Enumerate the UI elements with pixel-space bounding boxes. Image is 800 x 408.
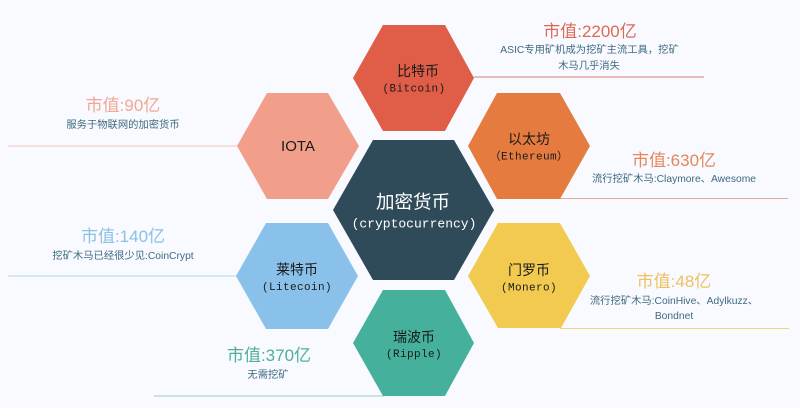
callout: Ethereum value: 市值:630亿 xyxy=(632,151,716,170)
hexagon: IOTA xyxy=(237,93,359,199)
callout: Litecoin value xyxy=(52,227,194,262)
leader line: Monero xyxy=(560,328,789,330)
hexagon: Ethereum xyxy=(468,93,590,199)
hexagon: Ripple: (Ripple) xyxy=(386,349,442,361)
hexagon: Monero: 门罗币 xyxy=(508,262,550,278)
callout: Ethereum value: 流行挖矿木马:Claymore、Awesome xyxy=(592,172,756,185)
callout: IOTA value: 服务于物联网的加密货币 xyxy=(66,118,180,131)
hexagon: Litecoin: 莱特币 xyxy=(276,262,318,278)
hexagon: Bitcoin: 比特币 xyxy=(397,63,439,79)
callout: Litecoin value: 挖矿木马已经很少见:CoinCrypt xyxy=(52,249,194,262)
hexagon: Bitcoin: (Bitcoin) xyxy=(382,84,446,96)
hexagon: Ethereum: 以太坊 xyxy=(508,131,550,147)
hexagon: Ripple xyxy=(353,290,474,396)
leader line: Ripple xyxy=(154,395,384,397)
hexagon: central cryptocurrency: 加密货币 xyxy=(376,192,450,212)
callout: Monero value: 流行挖矿木马:CoinHive、Adylkuzz、 xyxy=(590,294,758,307)
hexagon: central cryptocurrency xyxy=(333,140,494,280)
callout: Bitcoin value: ASIC专用矿机成为挖矿主流工具，挖矿 xyxy=(500,43,679,56)
callout: Monero value xyxy=(590,272,758,322)
leader line: Ethereum xyxy=(560,198,788,200)
callout: Ripple value xyxy=(227,346,311,381)
callout: Ripple value: 无需挖矿 xyxy=(247,368,289,381)
callout: Ethereum value xyxy=(592,151,756,185)
callout: Ripple value: 市值:370亿 xyxy=(227,346,311,365)
callout: Bitcoin value xyxy=(500,22,679,72)
hexagon: Bitcoin xyxy=(353,25,474,131)
hexagon: Litecoin: (Litecoin) xyxy=(262,282,332,294)
callout: Bitcoin value: 市值:2200亿 xyxy=(543,22,637,41)
callout: Monero value: 市值:48亿 xyxy=(637,272,711,291)
callout: IOTA value xyxy=(66,96,180,131)
hexagon: Ethereum: （Ethereum） xyxy=(490,150,568,164)
hexagon: Ripple: 瑞波币 xyxy=(393,329,435,345)
hexagon: Monero xyxy=(468,223,590,328)
callout: IOTA value: 市值:90亿 xyxy=(86,96,160,115)
leader line: Litecoin xyxy=(8,275,237,277)
leader line: IOTA xyxy=(8,145,237,147)
callout: Monero value: Bondnet xyxy=(655,311,693,322)
hexagon: Litecoin xyxy=(236,223,358,329)
hexagon: central cryptocurrency: (cryptocurrency) xyxy=(352,216,476,232)
callout: Bitcoin value: 木马几乎消失 xyxy=(558,59,620,72)
callout: Litecoin value: 市值:140亿 xyxy=(81,227,165,246)
hexagon: Monero: (Monero) xyxy=(501,282,557,294)
hexagon: IOTA: IOTA xyxy=(281,138,315,155)
leader line: Bitcoin xyxy=(474,76,704,78)
